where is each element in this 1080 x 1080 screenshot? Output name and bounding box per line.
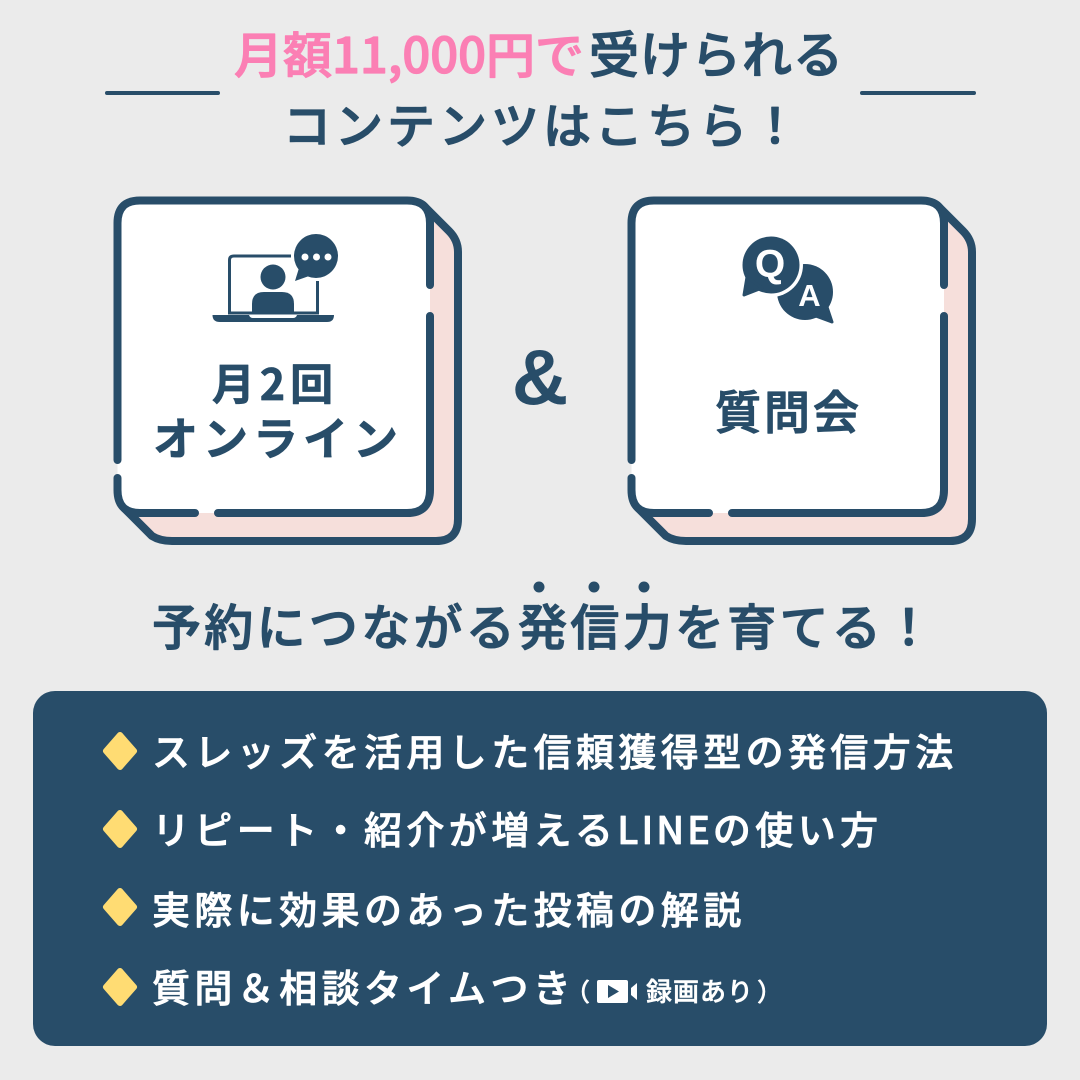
panel label: 月2回: 月2回	[212, 351, 338, 413]
title: 受けられる	[589, 16, 844, 88]
icon: Q and A speech bubbles: A	[798, 278, 821, 313]
panel: monthly online sessions	[118, 200, 458, 541]
panel label: オンライン: オンライン	[153, 403, 403, 468]
title: コンテンツはこちら！	[283, 87, 803, 157]
list item 2: リピート・紹介が増えるLINEの使い方	[152, 800, 883, 855]
list item 4: （	[565, 973, 590, 1009]
list item 4: ）	[757, 973, 782, 1009]
icon: video camera	[597, 980, 637, 1003]
panel: Q&A session	[632, 200, 972, 541]
title: 月額11,000円で	[234, 17, 584, 88]
list item 4: 質問＆相談タイムつき	[152, 958, 575, 1013]
icon: laptop with person and speech bubble	[212, 234, 338, 322]
icon: Q and A speech bubbles: Q	[755, 243, 785, 286]
panel label: 質問会: 質問会	[715, 377, 862, 443]
title	[107, 16, 974, 157]
list item 1: スレッズを活用した信頼獲得型の発信方法	[152, 722, 958, 777]
subheading: 予約につながる発信力を育てる！	[152, 589, 937, 660]
panel: content list	[33, 691, 1047, 1046]
icon: Q and A speech bubbles	[739, 233, 833, 322]
list item 4	[106, 958, 782, 1013]
list item 3: 実際に効果のあった投稿の解説	[152, 880, 746, 935]
recording note: 録画あり	[646, 972, 754, 1009]
ampersand: &	[512, 333, 568, 421]
